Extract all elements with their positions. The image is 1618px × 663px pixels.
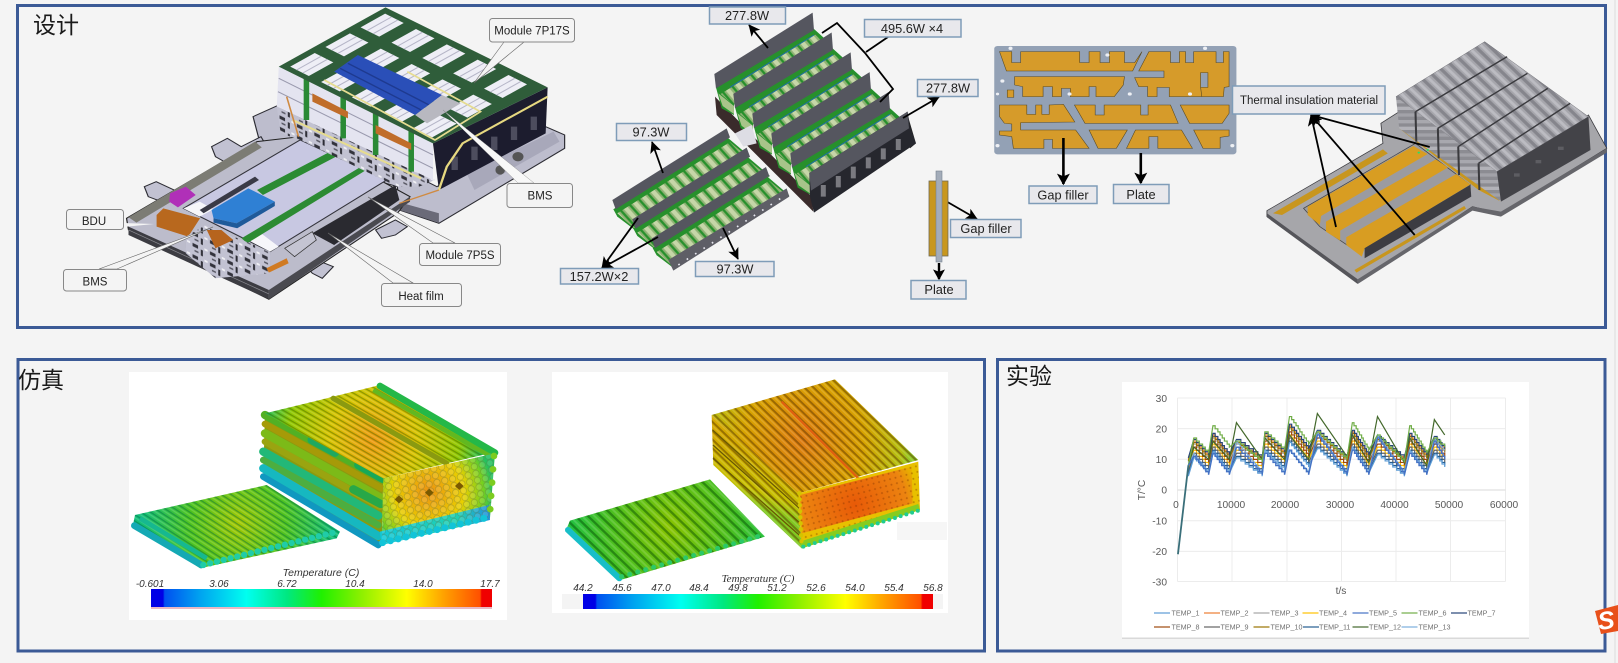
temperature colour bar B: 54.0 bbox=[845, 583, 865, 594]
label: Thermal insulation material: Thermal insulation material bbox=[1240, 95, 1378, 107]
temperature colour bar B: 56.8 bbox=[923, 583, 943, 594]
label: Gap filler side bbox=[950, 220, 1021, 238]
diagram: thermal insulation tray bbox=[1267, 42, 1607, 284]
legend: TEMP_12 bbox=[1369, 623, 1401, 632]
legend: TEMP_3 bbox=[1270, 609, 1298, 618]
icon: input method badge: S bbox=[1596, 606, 1617, 636]
temperature colour bar B bbox=[573, 573, 943, 609]
temperature colour bar B: 47.0 bbox=[651, 583, 671, 594]
callout: Module 7P5S: Module 7P5S bbox=[425, 250, 495, 262]
label: 277.8W top bbox=[710, 7, 786, 24]
label: Gap filler bbox=[1029, 186, 1097, 204]
legend: TEMP_5 bbox=[1369, 609, 1397, 618]
legend: TEMP_6 bbox=[1418, 609, 1446, 618]
label: Gap filler side: Gap filler bbox=[960, 221, 1012, 236]
label: Plate: Plate bbox=[1126, 187, 1156, 202]
callout: Heat film bbox=[382, 284, 462, 306]
line chart: temperature vs time: 10 bbox=[1156, 455, 1167, 466]
line chart: temperature vs time: 30000 bbox=[1326, 500, 1354, 511]
legend bbox=[1154, 609, 1495, 632]
label: 495.6W x4 bbox=[864, 20, 961, 37]
callout: BDU bbox=[66, 210, 124, 230]
line chart: temperature vs time: 50000 bbox=[1435, 500, 1463, 511]
temperature colour bar A: 14.0 bbox=[413, 579, 433, 590]
legend: TEMP_8 bbox=[1172, 623, 1199, 632]
callout: Module 7P17S: Module 7P17S bbox=[494, 26, 570, 38]
line chart: temperature vs time: -30 bbox=[1152, 578, 1167, 588]
temperature colour bar B: Temperature (C) bbox=[722, 573, 795, 585]
simulation image B bbox=[552, 372, 948, 613]
callout: BMS lower bbox=[64, 270, 126, 291]
label: Gap filler: Gap filler bbox=[1037, 188, 1089, 202]
temperature colour bar B: 48.4 bbox=[689, 583, 709, 594]
label: 157.2W x2: 157.2W×2 bbox=[570, 269, 628, 284]
line chart: temperature vs time: 0 bbox=[1173, 500, 1179, 511]
legend: TEMP_13 bbox=[1418, 623, 1450, 632]
panel: simulation bbox=[18, 360, 984, 651]
temperature colour bar B: 49.8 bbox=[728, 583, 748, 594]
diagram: cooling plate with gap filler bbox=[994, 46, 1236, 154]
legend: TEMP_10 bbox=[1270, 623, 1302, 632]
thermal model B bbox=[566, 379, 920, 581]
temperature colour bar A: 10.4 bbox=[345, 579, 365, 590]
label: 97.3W bottom bbox=[696, 262, 774, 276]
temperature colour bar B: 52.6 bbox=[806, 583, 826, 594]
line chart: temperature vs time: T/°C bbox=[1137, 480, 1148, 500]
temperature colour bar A: 17.7 bbox=[480, 579, 500, 590]
line chart: temperature vs time: 60000 bbox=[1490, 500, 1518, 511]
label: Plate bbox=[1114, 184, 1169, 204]
line chart: temperature vs time: 40000 bbox=[1380, 500, 1409, 511]
diagram: plate and gap filler section bbox=[929, 171, 948, 262]
label: Plate side: Plate bbox=[924, 282, 954, 297]
legend: TEMP_2 bbox=[1220, 609, 1248, 618]
simulation image A bbox=[129, 372, 507, 620]
label: 495.6W x4: 495.6W ×4 bbox=[881, 21, 943, 36]
heading: simulation: 仿真 bbox=[18, 367, 64, 393]
thermal model A bbox=[133, 385, 497, 568]
panel: experiment bbox=[998, 360, 1605, 651]
label: Thermal insulation material bbox=[1232, 86, 1385, 114]
legend: TEMP_9 bbox=[1220, 623, 1248, 632]
temperature colour bar A: 6.72 bbox=[277, 579, 297, 590]
data series bbox=[1178, 414, 1445, 554]
label: 97.3W top: 97.3W bbox=[632, 124, 670, 140]
callout: Module 7P5S bbox=[420, 244, 500, 266]
label: 97.3W top bbox=[616, 124, 686, 140]
temperature colour bar A bbox=[136, 567, 500, 608]
temperature colour bar A: -0.601 bbox=[136, 579, 164, 590]
legend: TEMP_7 bbox=[1468, 609, 1495, 618]
line chart: temperature vs time: 0 bbox=[1161, 486, 1167, 496]
label: 277.8W top: 277.8W bbox=[725, 8, 770, 23]
line chart: temperature vs time bbox=[1122, 382, 1529, 639]
callout pointers bbox=[99, 42, 534, 283]
label: 277.8W right bbox=[918, 80, 978, 96]
panel: design bbox=[18, 6, 1607, 328]
temperature colour bar A: Temperature (C) bbox=[283, 567, 359, 579]
line chart: temperature vs time: -20 bbox=[1152, 547, 1167, 558]
callout: BMS lower: BMS bbox=[83, 276, 108, 288]
lower module group with heat power bbox=[612, 125, 789, 271]
line chart: temperature vs time: 10000 bbox=[1217, 500, 1245, 511]
label: 97.3W bottom: 97.3W bbox=[716, 262, 754, 276]
line chart: temperature vs time: 20 bbox=[1156, 424, 1167, 436]
line chart: temperature vs time: -10 bbox=[1152, 516, 1167, 528]
callout: BDU: BDU bbox=[82, 216, 106, 228]
line chart: temperature vs time: 20000 bbox=[1271, 500, 1299, 511]
arrows: heat power bbox=[602, 23, 977, 279]
arrows: insulation bbox=[1311, 115, 1430, 235]
label: 277.8W right: 277.8W bbox=[926, 80, 971, 96]
legend: TEMP_4 bbox=[1319, 609, 1347, 618]
legend: TEMP_11 bbox=[1319, 623, 1350, 632]
temperature colour bar A: 3.06 bbox=[209, 579, 229, 590]
arrows: gap filler and plate bbox=[1063, 138, 1141, 184]
line chart: temperature vs time: 30 bbox=[1156, 394, 1167, 405]
heading: design: 设计 bbox=[33, 12, 79, 38]
callout: Module 7P17S bbox=[490, 18, 574, 42]
temperature colour bar B: 45.6 bbox=[612, 583, 632, 594]
legend: TEMP_1 bbox=[1172, 609, 1199, 618]
temperature colour bar B: 51.2 bbox=[767, 583, 787, 594]
heading: experiment: 实验 bbox=[1006, 363, 1052, 389]
callout: BMS upper bbox=[507, 184, 572, 208]
battery pack CAD assembly bbox=[127, 7, 565, 299]
upper module group with heat power bbox=[714, 13, 916, 213]
line chart: temperature vs time: t/s bbox=[1336, 586, 1346, 597]
callout: Heat film: Heat film bbox=[398, 291, 444, 303]
window edge line bbox=[1614, 0, 1616, 663]
callout: BMS upper: BMS bbox=[528, 190, 553, 202]
temperature colour bar B: 44.2 bbox=[573, 583, 593, 594]
temperature colour bar B: 55.4 bbox=[884, 583, 904, 594]
label: Plate side bbox=[911, 280, 966, 299]
